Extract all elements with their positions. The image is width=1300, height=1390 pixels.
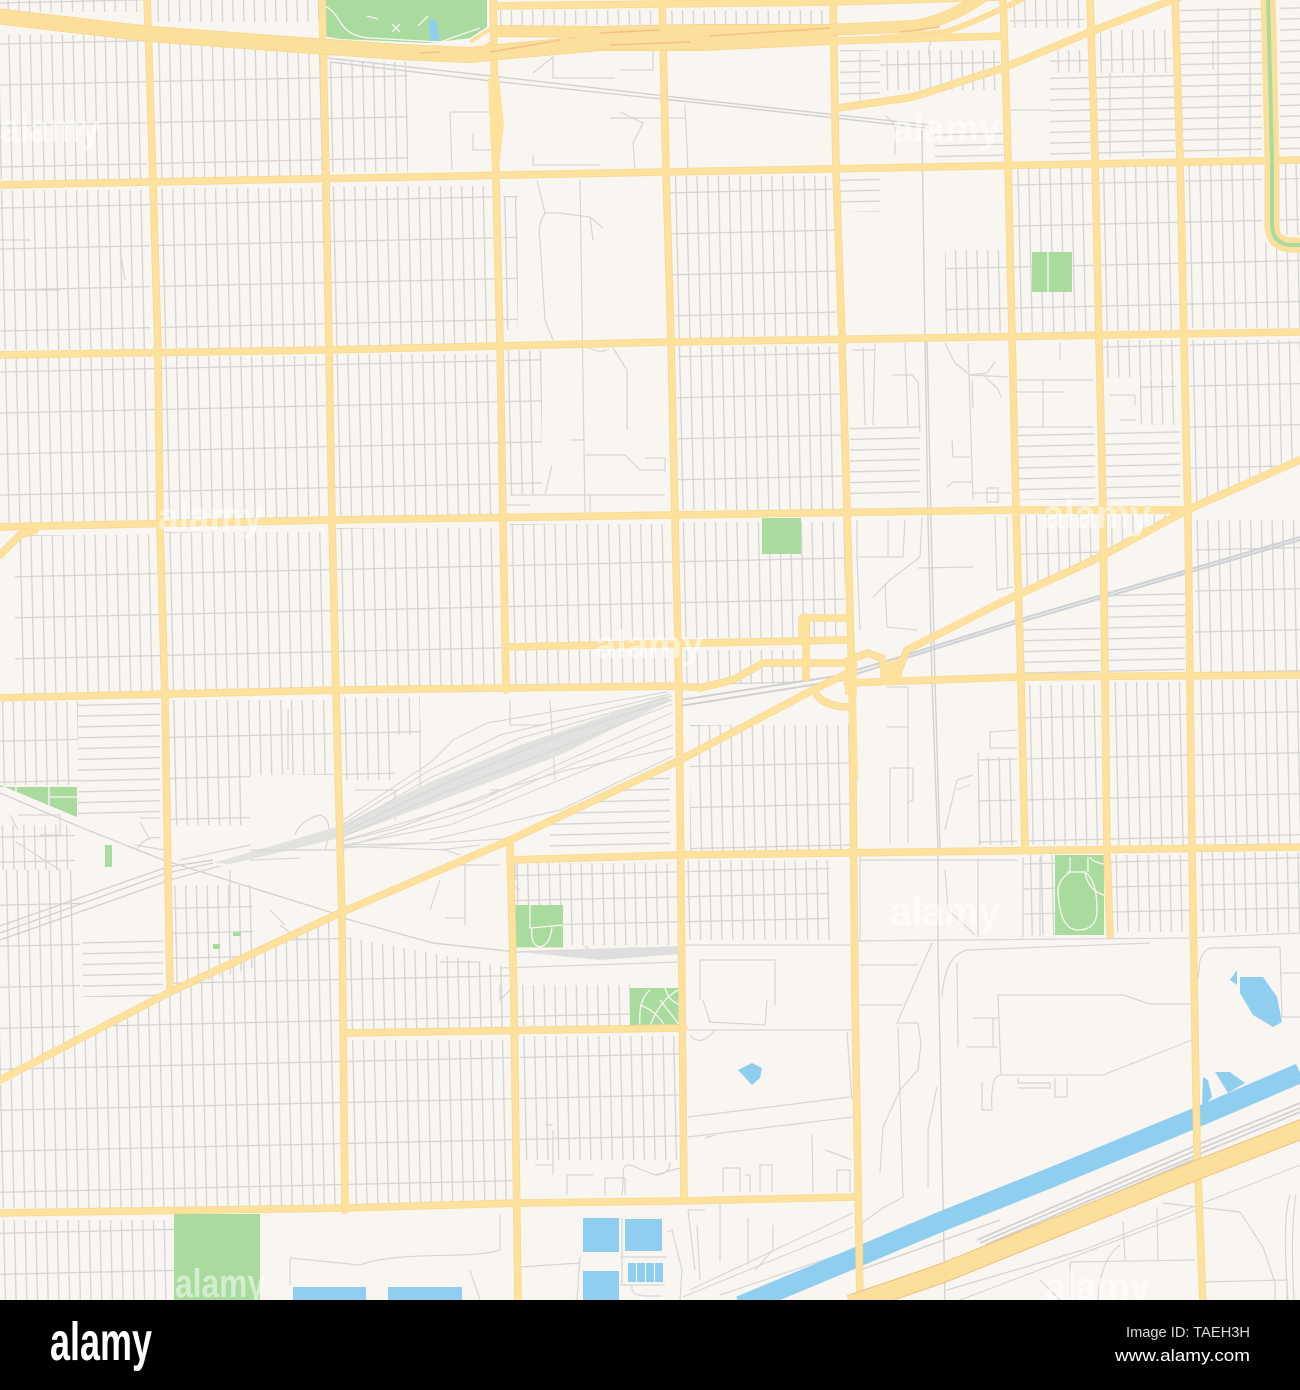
watermarks: alamy: [892, 107, 1001, 151]
watermarks: alamy: [1045, 1265, 1151, 1309]
rail yard: [213, 692, 680, 960]
website: www.alamy.com: [1114, 1346, 1250, 1365]
watermarks: alamy: [158, 495, 264, 539]
watermarks: alamy: [1043, 493, 1152, 537]
green median at right: [1268, 0, 1300, 245]
lower expressway: [850, 1126, 1300, 1305]
watermarks: alamy: [595, 623, 704, 667]
image id: Image ID: TAEH3H: [1126, 1324, 1250, 1341]
watermarks: alamy: [0, 107, 101, 151]
widened road segment: [488, 78, 504, 172]
watermarks: alamy: [175, 1262, 266, 1306]
canal: [740, 1072, 1300, 1306]
logo: alamy: alamy: [50, 1312, 152, 1372]
upper expressway: [0, 0, 1030, 55]
expressway median lines: [420, 27, 940, 53]
ramp road at right: [1268, 0, 1300, 245]
small junction near viaduct: [845, 658, 857, 695]
interchange junction: [880, 658, 900, 678]
park paths: [16, 5, 1104, 1026]
widened road segment below interchange: [848, 690, 858, 780]
settling tanks: [628, 1263, 663, 1282]
water features: [293, 20, 1282, 1300]
watermarks: [0, 107, 1152, 1309]
canal inlets: [1202, 1072, 1245, 1108]
watermarks: alamy: [890, 890, 1001, 934]
parks: [0, 0, 1104, 1300]
footer band: [0, 1300, 1300, 1390]
